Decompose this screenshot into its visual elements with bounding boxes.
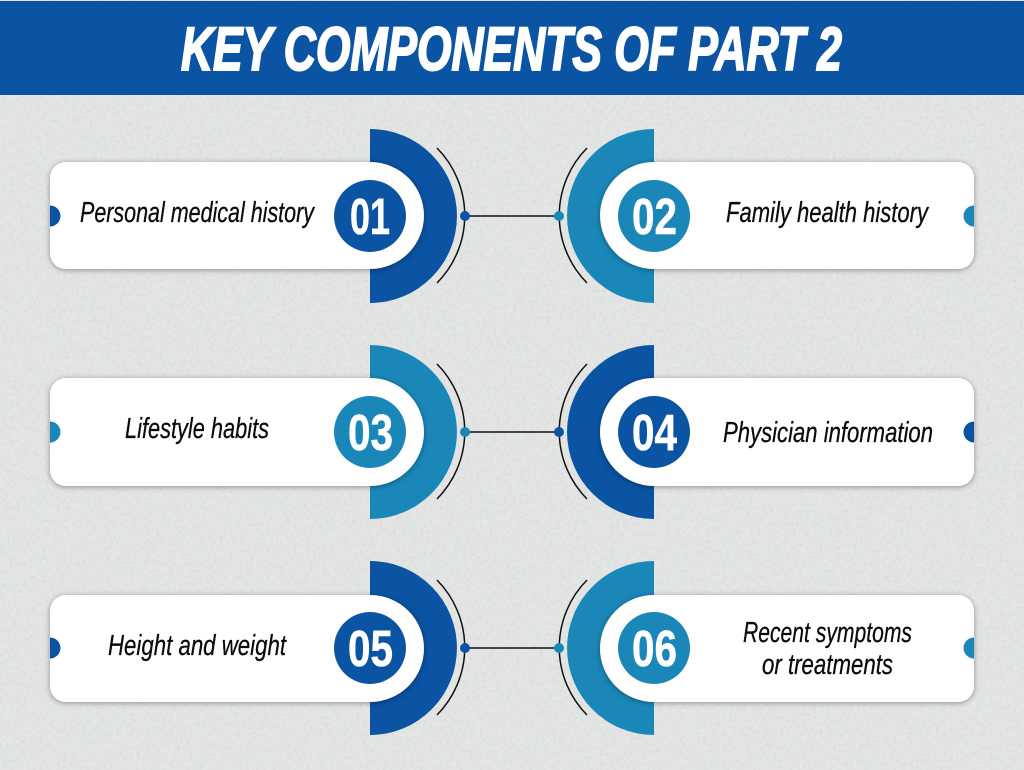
panel: 03 lifestyle habits: [50, 345, 558, 519]
panel: 06 recent symptoms or treatments: or treatments: [762, 649, 893, 681]
panel: 01 personal medical history: Personal medical history: [80, 197, 315, 229]
panel: 05 height and weight: Height and weight: [108, 630, 287, 662]
title banner: [0, 1, 1024, 95]
panel: 04 physician information: [554, 345, 974, 519]
panel: 06 recent symptoms or treatments: Recent symptoms: [743, 617, 912, 649]
panel: 02 family health history: Family health history: [726, 197, 929, 229]
panel: 06 recent symptoms or treatments: [554, 561, 974, 735]
panel: 04 physician information: Physician information: [723, 417, 933, 449]
panel: 06 recent symptoms or treatments: 06: [632, 620, 677, 677]
panel: 03 lifestyle habits: Lifestyle habits: [125, 413, 269, 445]
panel: 02 family health history: 02: [632, 188, 677, 245]
panel: 04 physician information: 04: [632, 404, 677, 461]
panel: 01 personal medical history: 01: [350, 188, 390, 245]
panel: 03 lifestyle habits: 03: [348, 404, 393, 461]
panel: 05 height and weight: 05: [348, 620, 393, 677]
panel: 02 family health history: [554, 129, 974, 303]
panel: 05 height and weight: [50, 561, 558, 735]
panel: 01 personal medical history: [50, 129, 558, 303]
